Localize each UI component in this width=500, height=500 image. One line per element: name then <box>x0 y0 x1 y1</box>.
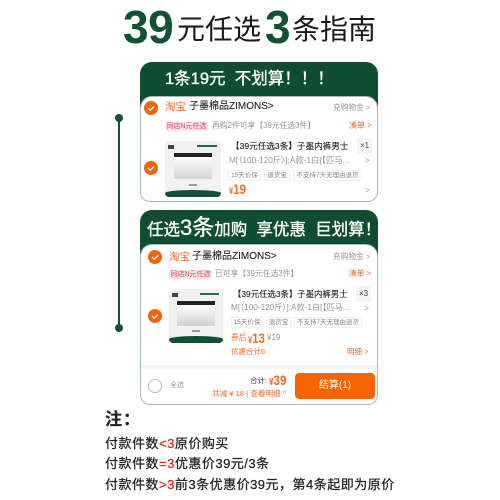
icon: shop checkbox <box>144 101 158 115</box>
promo row: 同店N元任选 <box>170 271 211 278</box>
quantity: ×3 <box>359 289 368 298</box>
promo row <box>165 121 372 131</box>
service tags: 不支持7天无理由退货 <box>296 172 359 179</box>
panel: single item price <box>140 62 378 202</box>
service tags: 15天价保 <box>234 319 260 326</box>
product variant: M[（100-120斤）];A款-1白[【匹马... <box>231 303 350 312</box>
notes heading: 注： <box>105 410 141 429</box>
checkout button: 结算(1) <box>319 380 351 391</box>
total: 合计: <box>250 376 267 385</box>
select all <box>148 379 184 393</box>
product thumbnail <box>169 289 223 343</box>
product title: 【39元任选3条】子墨内裤男士 <box>233 289 347 299</box>
savings line: 共减 ¥ 18 | 查看明细 ^ <box>212 389 286 398</box>
coupon price: 券后 <box>231 333 246 342</box>
shop link: 充购物金 > <box>333 252 370 261</box>
panel: three item offer <box>140 210 378 405</box>
coupon price: ¥19 <box>267 333 280 342</box>
quantity <box>356 286 371 302</box>
promo row: 同店N元任选 <box>166 123 207 130</box>
title: 39 <box>123 1 173 53</box>
panel heading: 任选3条加购 享优惠 巨划算！ <box>147 215 381 240</box>
details link: 明细 > <box>347 347 368 356</box>
total <box>250 372 286 388</box>
icon: item checkbox <box>144 161 158 175</box>
title: 3 <box>265 1 291 53</box>
shop link: 充购物金 > <box>333 103 370 112</box>
shop name <box>169 250 277 263</box>
note line 3: 付款件数>3前3条优惠价39元，第4条起即为原价 <box>105 477 395 492</box>
promo row: 再购2件可享【39元任选3件】 <box>212 121 315 130</box>
total: ¥39 <box>269 372 286 388</box>
coupon price <box>231 330 280 346</box>
service tags: 不支持7天无理由退货 <box>297 319 359 326</box>
cart card <box>141 245 377 404</box>
note line 1: 付款件数<3原价购买 <box>105 436 229 451</box>
service tags: 15天价保 <box>231 172 258 179</box>
promo row <box>169 269 371 279</box>
shop name <box>165 100 274 113</box>
promo row: 凑单 > <box>349 121 372 130</box>
timeline connector <box>115 114 123 332</box>
service tags: 退货宝 <box>267 172 287 179</box>
note line 2: 付款件数=3优惠价39元/3条 <box>105 456 270 471</box>
checkout button <box>295 373 375 399</box>
item arrow: > <box>365 185 370 195</box>
icon: item checkbox <box>148 309 162 323</box>
discount total: 优惠合计6 <box>231 347 265 356</box>
title: 条指南 <box>292 14 376 45</box>
variant arrow: > <box>365 155 370 165</box>
promo row: 凑单 > <box>349 269 371 278</box>
shop name: 淘宝 <box>165 101 186 113</box>
product title: 【39元任选3条】子墨内裤男士 <box>231 141 348 151</box>
coupon price: ¥13 <box>248 330 265 346</box>
service tags <box>231 317 362 328</box>
price: ¥19 <box>229 181 246 197</box>
icon: shop checkbox <box>148 250 162 264</box>
title <box>123 1 376 53</box>
variant arrow: > <box>364 303 369 313</box>
shop name: 子墨棉品ZIMONS> <box>192 251 277 262</box>
product variant: M[（100-120斤）];A款-1白[【匹马... <box>229 155 349 165</box>
quantity <box>357 138 372 154</box>
service tags <box>228 170 362 181</box>
select all: 全选 <box>170 382 184 389</box>
shop name: 子墨棉品ZIMONS> <box>189 101 274 112</box>
title: 元任选 <box>177 14 261 45</box>
product thumbnail <box>165 141 221 197</box>
notes <box>105 410 395 492</box>
divider band <box>141 365 377 369</box>
shop name: 淘宝 <box>169 251 190 263</box>
quantity: ×1 <box>360 141 369 150</box>
cart card <box>141 97 377 201</box>
service tags: 退货宝 <box>269 319 288 326</box>
panel heading: 1条19元 不划算！！！ <box>165 70 334 88</box>
promo row: 已可享【39元任选3件】 <box>215 269 298 278</box>
